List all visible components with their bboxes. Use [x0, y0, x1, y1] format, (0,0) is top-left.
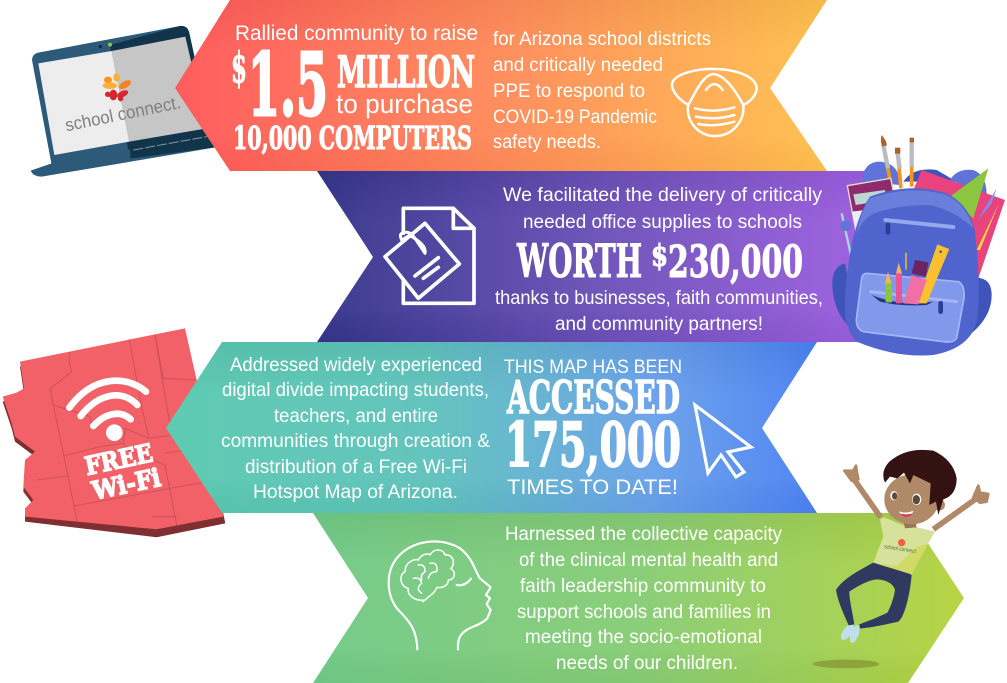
shadow — [813, 660, 879, 668]
trousers — [836, 563, 912, 629]
neck — [903, 518, 917, 528]
school connect wordmark: school connect. — [63, 92, 182, 135]
icon: head with brain — [389, 542, 491, 649]
zipper — [885, 220, 953, 227]
panel: ribbon 2 supplies — [317, 171, 915, 342]
text: PPE: PPE to respond to — [493, 80, 645, 102]
text: supplies delivery: WORTH — [516, 234, 642, 288]
text: PPE — [493, 28, 711, 153]
text: mental health: needs of our children. — [556, 652, 738, 674]
free wi-fi label: FREE — [82, 437, 155, 481]
text: PPE: and critically needed — [493, 54, 663, 76]
text: map accessed stat: TIMES TO DATE! — [507, 476, 678, 499]
calculator — [847, 178, 894, 235]
face — [884, 474, 939, 524]
side pockets — [832, 263, 860, 335]
compass — [840, 213, 852, 258]
text: digital divide: communities through creation & — [221, 430, 490, 452]
icon: document with note — [385, 208, 474, 303]
brushes — [881, 135, 914, 188]
text: supplies delivery — [495, 184, 823, 335]
panel: ribbon 4 mental health — [313, 513, 964, 683]
pocket — [856, 273, 964, 342]
panel: ribbon 3 digital divide — [166, 342, 817, 513]
free wi-fi label — [82, 437, 163, 506]
text: digital divide: distribution of a Free Wi-Fi — [245, 456, 467, 478]
text: mental health — [505, 523, 782, 674]
bag body — [845, 188, 979, 356]
text: mental health: faith leadership community to — [520, 575, 766, 597]
text: digital divide: Addressed widely experienced — [230, 354, 482, 376]
hair — [883, 450, 957, 515]
boy illustration — [813, 450, 988, 668]
text: map accessed stat — [504, 356, 682, 499]
pencils and ruler — [885, 244, 949, 304]
text: fundraising headline: $ — [231, 43, 247, 92]
wifi symbol — [69, 381, 146, 441]
eyes and mouth — [890, 491, 921, 517]
boy illustration: school connect — [884, 544, 917, 555]
text: map accessed stat: ACCESSED — [506, 371, 680, 424]
text: digital divide: digital divide impacting students, — [222, 379, 489, 401]
text: fundraising headline: 1.5 — [248, 35, 328, 136]
text: mental health: Harnessed the collective capacity — [505, 523, 782, 545]
text: PPE: COVID-19 Pandemic — [493, 106, 657, 128]
shirt logo — [898, 539, 905, 546]
text: PPE: for Arizona school districts — [493, 28, 711, 50]
text: PPE: safety needs. — [493, 131, 601, 153]
text: map accessed stat: THIS MAP HAS BEEN — [504, 356, 682, 378]
text: digital divide: Hotspot Map of Arizona. — [253, 481, 458, 503]
free wi-fi label: Wi-Fi — [88, 462, 163, 506]
text: supplies delivery: We facilitated the delivery of critically — [503, 184, 822, 206]
text: supplies delivery: thanks to businesses, faith communities, — [495, 287, 823, 309]
map of Arizona — [3, 328, 225, 537]
text: fundraising headline: 10,000 COMPUTERS — [233, 119, 472, 157]
text: fundraising headline: MILLION — [337, 48, 475, 98]
text: fundraising headline: Rallied community to raise — [235, 22, 478, 45]
text: fundraising headline — [231, 22, 478, 157]
text: digital divide — [221, 354, 490, 503]
icon: face mask — [672, 69, 757, 136]
text: supplies delivery: 230,000 — [668, 237, 803, 288]
text: digital divide: teachers, and entire — [274, 405, 438, 427]
text: mental health: of the clinical mental health and — [519, 549, 778, 571]
text: mental health: meeting the socio-emotional — [525, 626, 762, 648]
school connect logo — [103, 73, 132, 101]
text: map accessed stat: 175,000 — [505, 410, 681, 481]
text: supplies delivery: needed office supplies to schools — [523, 211, 802, 233]
backpack illustration — [832, 135, 1005, 356]
laptop illustration — [31, 26, 220, 177]
panel: ribbon 1 fundraising — [175, 0, 827, 171]
arms — [844, 466, 988, 529]
text: supplies delivery: and community partners! — [555, 313, 763, 335]
text: supplies delivery: $ — [651, 239, 668, 274]
text: mental health: support schools and families in — [517, 601, 771, 623]
text: fundraising headline: to purchase — [336, 89, 473, 119]
shoes — [838, 622, 862, 644]
back straps and folder — [862, 162, 900, 185]
shirt — [873, 517, 935, 574]
icon: cursor arrow — [695, 405, 751, 477]
